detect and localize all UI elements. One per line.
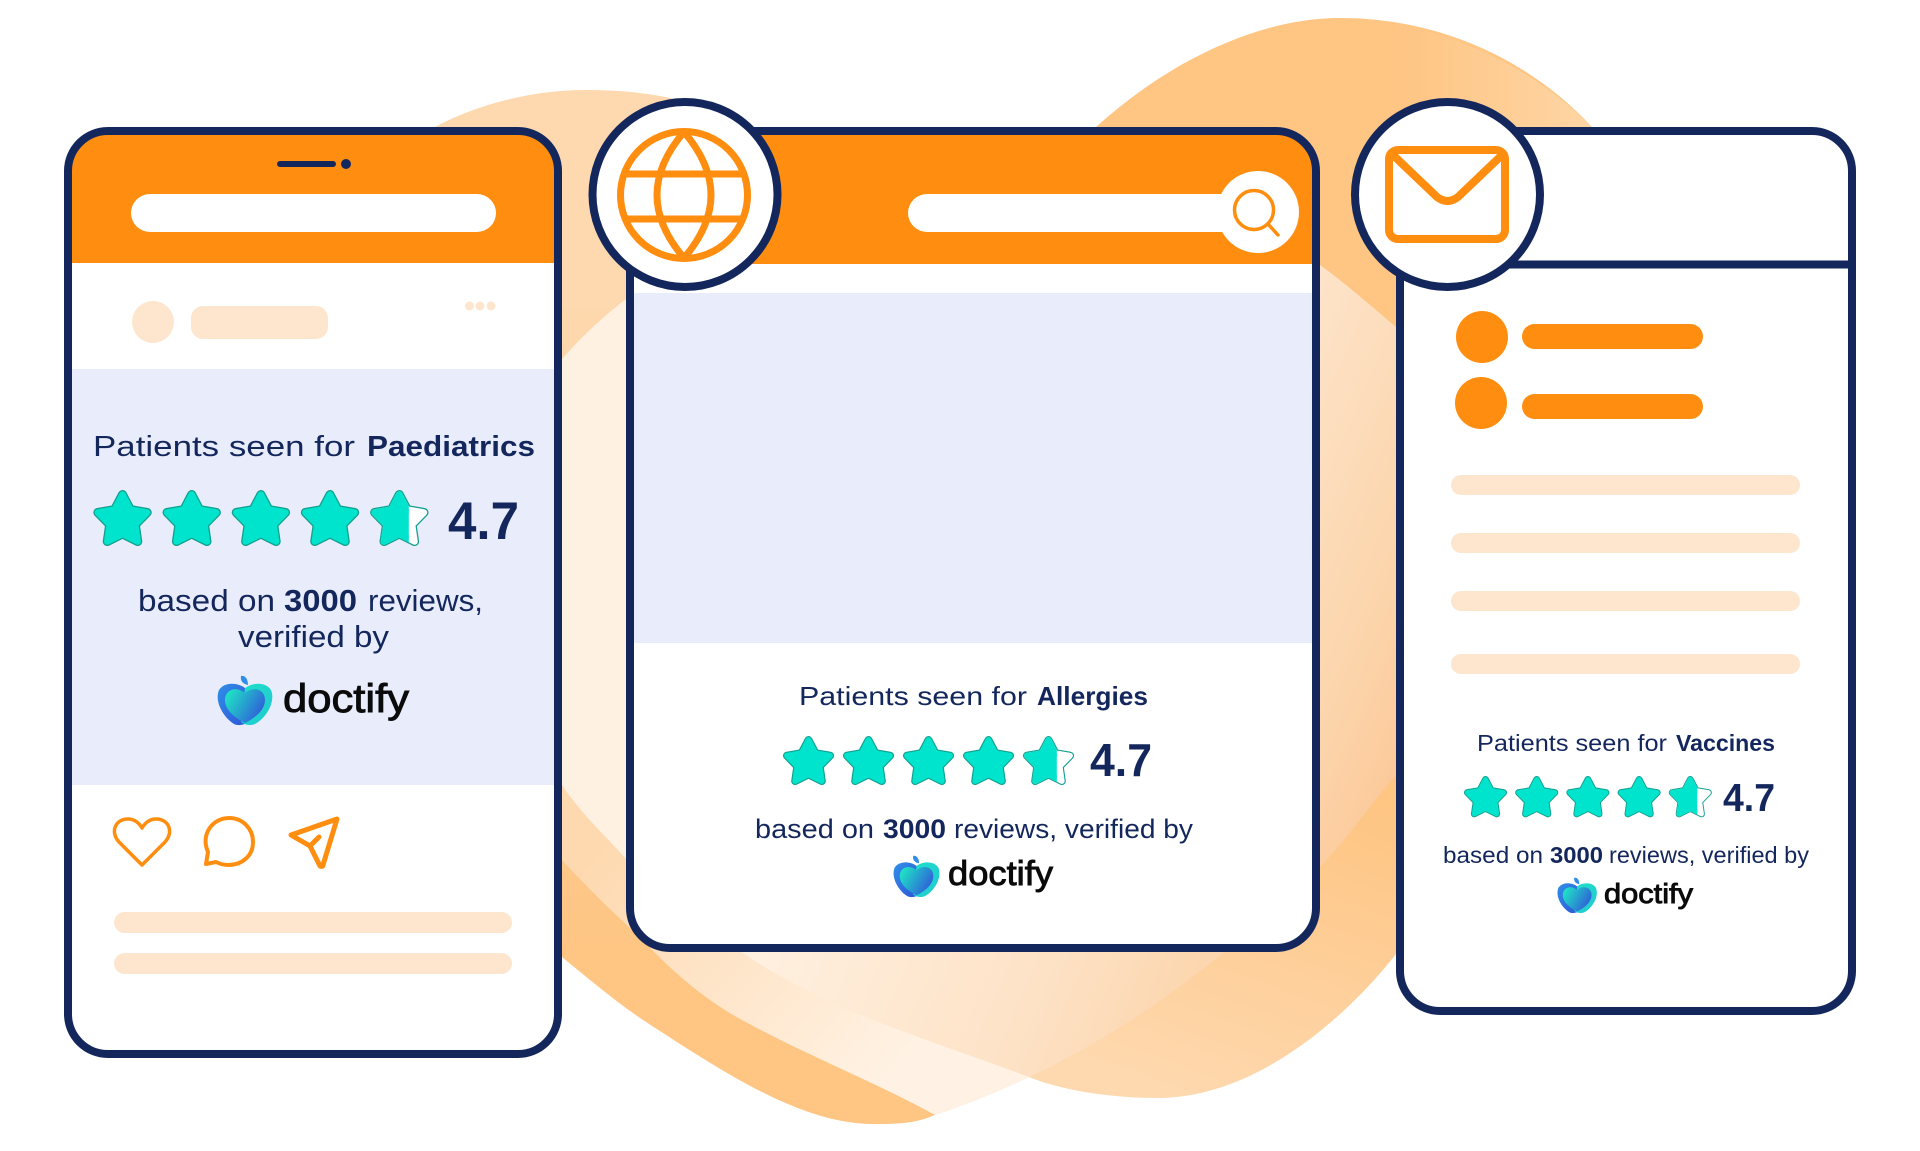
logo: doctify: doctify bbox=[283, 677, 409, 721]
background blob: fading band bbox=[500, 650, 1029, 1115]
review count text: based on bbox=[755, 814, 874, 844]
review count text: based on bbox=[138, 583, 275, 618]
post author placeholder bbox=[132, 301, 496, 343]
heading: Vaccines bbox=[1477, 730, 1775, 756]
logo: doctify: doctify bbox=[948, 855, 1053, 893]
background blob: overlap bbox=[500, 180, 1480, 1077]
phone header bbox=[60, 125, 570, 785]
panel: phone social post bbox=[60, 125, 570, 1054]
panel: email window bbox=[1400, 131, 1852, 1011]
browser header and hero bbox=[625, 125, 1325, 643]
review count text: 3000 bbox=[1550, 842, 1603, 868]
body placeholder lines bbox=[1451, 475, 1800, 674]
icon: heart bbox=[114, 819, 170, 865]
phone notch bbox=[277, 159, 351, 169]
logo: doctify bbox=[894, 855, 1053, 897]
logo: doctify bbox=[218, 676, 409, 725]
review count text: 3000 bbox=[883, 814, 946, 844]
background blob: left bbox=[200, 90, 1480, 1124]
review count text bbox=[1443, 842, 1810, 868]
browser frame bbox=[630, 131, 1316, 948]
browser search bar bbox=[908, 171, 1299, 253]
background blob: right bbox=[630, 18, 1800, 1098]
review count text bbox=[755, 814, 1194, 844]
icon: send bbox=[291, 819, 337, 866]
heading: Allergies: Patients seen for bbox=[799, 681, 1027, 711]
logo: doctify bbox=[1557, 878, 1693, 913]
heading: Paediatrics: Patients seen for bbox=[93, 431, 355, 463]
rating number: 4.7 bbox=[448, 492, 519, 551]
icon: comment bubble bbox=[206, 818, 253, 865]
heading: Paediatrics: Paediatrics bbox=[367, 431, 535, 463]
phone search pill bbox=[131, 194, 496, 232]
review count text: reviews, bbox=[368, 583, 483, 618]
heading: Allergies bbox=[799, 681, 1148, 711]
review count text: based on bbox=[1443, 842, 1543, 868]
email divider bbox=[1400, 260, 1852, 268]
rating number: 4.7 bbox=[1090, 734, 1152, 786]
heading: Vaccines: Patients seen for bbox=[1477, 730, 1667, 756]
star rating bbox=[787, 740, 1070, 781]
review count text bbox=[138, 583, 483, 654]
review count text: reviews, verified by bbox=[1609, 842, 1810, 868]
panel: browser window bbox=[625, 125, 1325, 948]
phone frame bbox=[68, 131, 558, 1054]
right blob top highlight bbox=[1400, 25, 1592, 140]
logo: doctify: doctify bbox=[1604, 878, 1693, 909]
icon: globe badge bbox=[592, 102, 778, 287]
content placeholder lines bbox=[114, 912, 512, 974]
rating number: 4.7 bbox=[1723, 777, 1775, 820]
star rating bbox=[98, 494, 424, 542]
review count text: verified by bbox=[238, 619, 390, 654]
review count text: 3000 bbox=[284, 583, 357, 618]
star rating bbox=[1467, 779, 1709, 814]
review count text: reviews, verified by bbox=[954, 814, 1194, 844]
highlighted list rows bbox=[1455, 311, 1703, 429]
heading: Paediatrics bbox=[93, 431, 535, 463]
heading: Vaccines: Vaccines bbox=[1676, 730, 1775, 756]
heading: Allergies: Allergies bbox=[1037, 681, 1148, 711]
icon: envelope badge bbox=[1355, 102, 1540, 287]
